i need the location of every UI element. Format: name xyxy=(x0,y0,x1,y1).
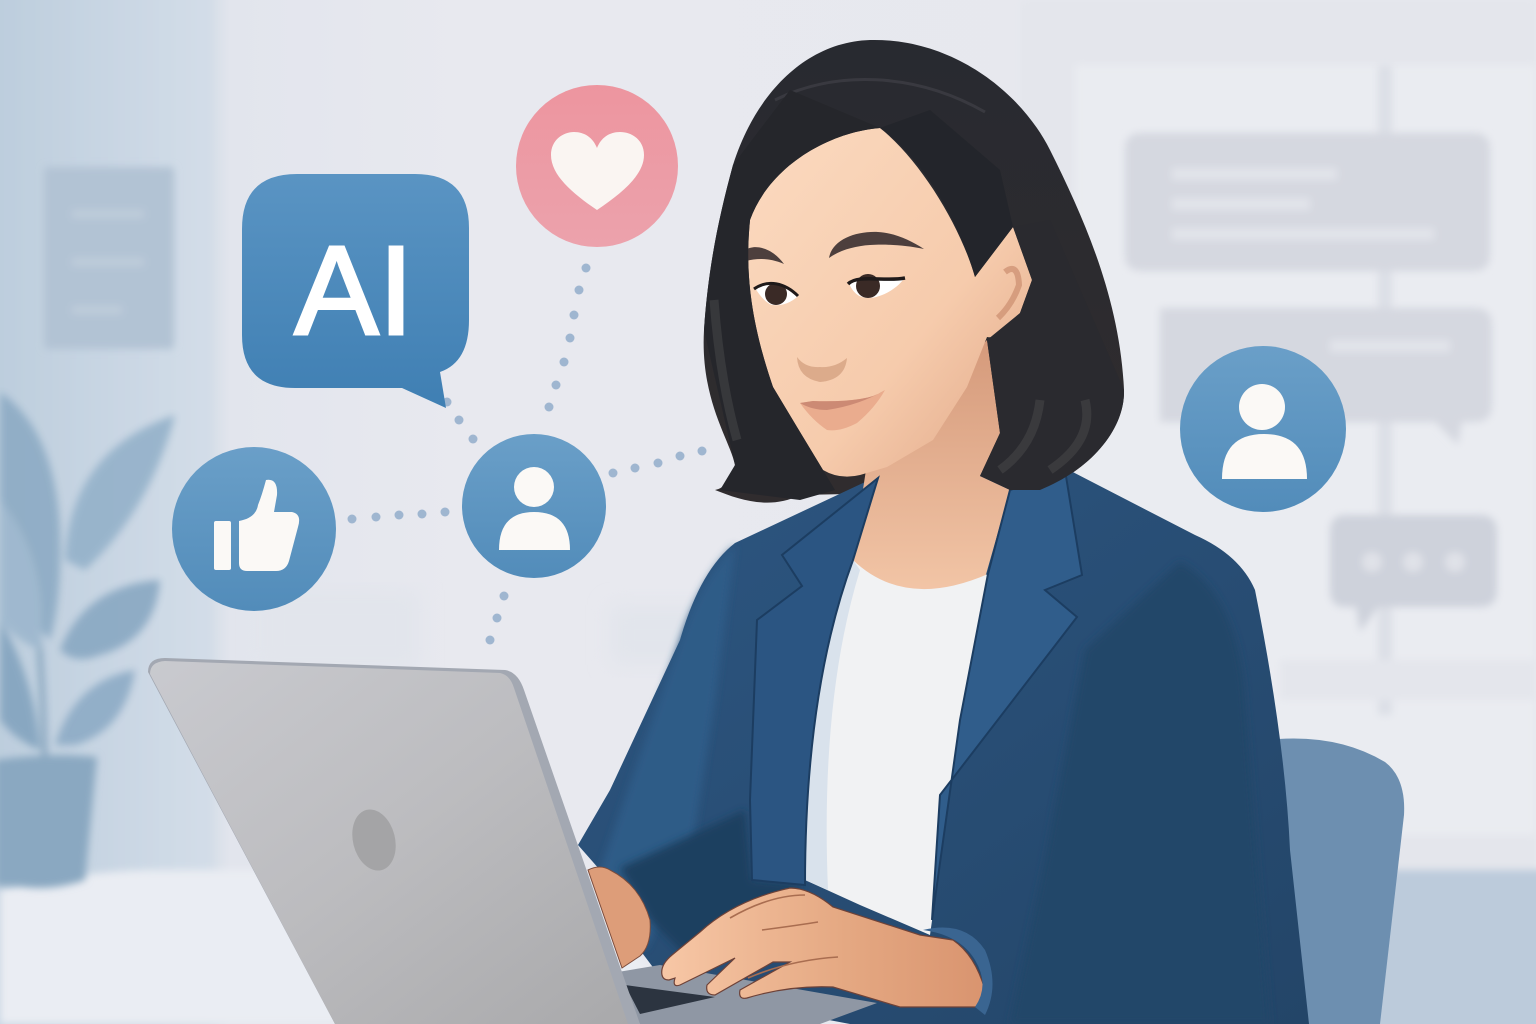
laptop base xyxy=(600,965,877,1024)
hair highlight strands xyxy=(745,79,1102,410)
background: faded chat panels xyxy=(1125,65,1536,715)
dotted connectors xyxy=(348,264,706,644)
near hand xyxy=(662,888,985,1007)
icon: right user badge xyxy=(1180,346,1346,512)
icon: central user badge xyxy=(462,434,606,578)
shirt shadow edge xyxy=(805,560,860,890)
icon: heart badge xyxy=(516,85,678,247)
hair back xyxy=(704,40,1124,503)
mouth xyxy=(800,390,885,430)
icon: AI speech bubble xyxy=(242,174,469,408)
eyebrows xyxy=(829,232,924,258)
neck xyxy=(852,340,1010,590)
laptop lid xyxy=(148,658,640,1024)
laptop logo xyxy=(346,805,402,875)
plant xyxy=(0,392,175,770)
jacket cuff xyxy=(923,928,992,1015)
left lapel xyxy=(750,478,878,885)
background: faded wall note xyxy=(44,167,174,349)
far hand xyxy=(588,867,650,968)
eyes xyxy=(849,277,903,298)
plant pot xyxy=(0,755,97,888)
right lapel xyxy=(932,470,1082,920)
table surface xyxy=(0,870,700,1024)
hair lower strand shine xyxy=(714,300,1087,470)
jacket fold shadows xyxy=(1010,562,1270,1024)
icon: AI speech bubble: AI xyxy=(294,220,414,361)
finger creases xyxy=(730,895,838,978)
face xyxy=(748,128,1032,477)
person xyxy=(578,40,1309,1024)
jacket xyxy=(578,468,1309,1024)
hair front right xyxy=(880,110,1013,277)
chair xyxy=(1278,738,1404,1024)
shirt xyxy=(805,560,988,935)
background: faded furniture xyxy=(260,590,720,670)
keyboard xyxy=(625,985,715,1014)
ear inner xyxy=(998,269,1019,318)
background: lower right floor band xyxy=(1280,870,1536,1024)
hair front left xyxy=(704,90,880,500)
nose xyxy=(797,357,847,382)
icon: thumbs up badge xyxy=(172,447,336,611)
